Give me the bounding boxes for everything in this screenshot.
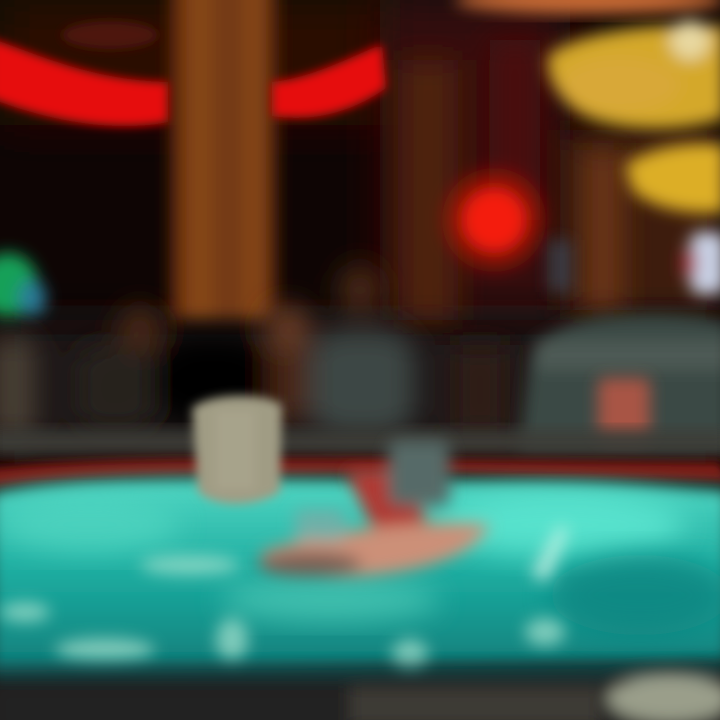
red and grey cards stack	[258, 440, 490, 577]
yellow chandelier: upper	[547, 20, 720, 129]
dark table edge	[0, 664, 720, 720]
orange ceiling light	[455, 0, 720, 14]
felt highlights	[0, 525, 568, 671]
teal table felt	[0, 477, 720, 672]
blue and red light: far right	[548, 232, 720, 294]
neon red sign: left	[0, 21, 168, 126]
yellow chandelier: lower	[625, 143, 720, 213]
table rail: red band	[0, 458, 720, 488]
blurred crowd	[0, 264, 510, 440]
wooden column: right	[398, 40, 623, 320]
table rail: grey band	[0, 430, 720, 454]
beige card holder	[192, 396, 282, 504]
wooden column: centre	[170, 0, 278, 320]
green light	[0, 253, 46, 317]
grey booth chair	[520, 314, 720, 450]
neon red sign: right	[272, 44, 386, 118]
red square on chair	[598, 378, 650, 440]
red round lamp	[442, 168, 546, 272]
